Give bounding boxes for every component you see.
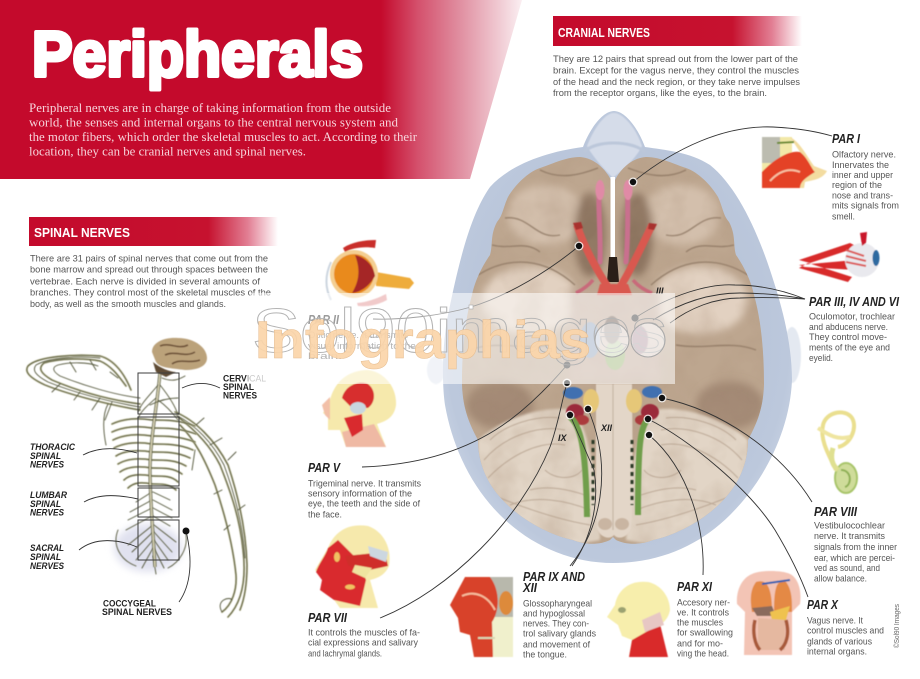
text block: PAR XI: ve. It controls xyxy=(677,608,729,618)
inner ear picture: PAR VIII xyxy=(818,412,857,493)
intro paragraph: location, they can be cranial nerves and spinal nerves. xyxy=(29,144,306,158)
label: sacral: SACRAL xyxy=(30,543,64,553)
label: cervical xyxy=(182,374,266,400)
leader: PAR I xyxy=(628,127,832,186)
label: thoracic: SPINAL xyxy=(30,451,61,461)
throat picture: PAR IX and XII xyxy=(450,577,513,657)
text block: PAR II xyxy=(308,313,416,362)
pelvic haze xyxy=(114,524,182,572)
intro paragraph: the motor fibers, which order the skeletal muscles to act. According to their xyxy=(29,130,418,144)
eye muscles picture: PAR III, IV, VI xyxy=(799,232,880,282)
text block: PAR VII xyxy=(308,611,420,660)
roman numeral labels xyxy=(558,286,664,443)
label: sacral: NERVES xyxy=(30,561,64,571)
leader: PAR VII xyxy=(380,378,572,618)
text block: PAR I: region of the xyxy=(832,180,882,191)
text block: PAR V: the face. xyxy=(308,510,342,520)
central slit xyxy=(607,177,619,282)
text block: PAR I: Innervates the xyxy=(832,160,889,171)
text block: PAR XI: Accesory ner- xyxy=(677,598,730,608)
text block: PAR I: PAR I xyxy=(832,132,860,146)
text block: PAR VII: It controls the muscles of fa- xyxy=(308,628,420,638)
text block: PAR XI: ving the head. xyxy=(677,648,729,660)
text block: PAR II: visual information to the xyxy=(308,341,416,352)
spinal cord xyxy=(138,372,185,567)
skeleton of nervous system figure xyxy=(27,338,247,617)
leader: PAR VIII xyxy=(658,394,812,502)
skull shell xyxy=(427,111,801,563)
translucent band xyxy=(250,293,675,384)
text block: PAR III, IV and VI: eyelid. xyxy=(809,353,833,364)
text block: PAR II: Optic nerve. It transmits xyxy=(308,330,408,341)
text block: PAR V xyxy=(308,461,421,520)
text block: PAR X: Vagus nerve. It xyxy=(807,616,863,626)
brain base xyxy=(462,157,764,544)
spinal nerves description xyxy=(30,254,271,310)
text block: PAR XI: and for mo- xyxy=(677,638,723,650)
text block: PAR VII: PAR VII xyxy=(308,611,347,625)
heading: cranial nerves xyxy=(553,16,802,46)
spinal segment labels xyxy=(30,374,266,617)
text block: PAR III, IV and VI: and abducens nerve. xyxy=(809,322,888,333)
label: lumbar: LUMBAR xyxy=(30,490,67,500)
text block: PAR VIII: ear, which are percei- xyxy=(814,553,895,564)
text block: PAR VIII: Vestibulocochlear xyxy=(814,520,885,532)
label: lumbar xyxy=(30,490,138,518)
text block: PAR I: Olfactory nerve. xyxy=(832,150,896,160)
intro paragraph: Peripheral nerves are in charge of taking information from the outside xyxy=(29,101,391,115)
label: sacral: SPINAL xyxy=(30,552,61,562)
text block: PAR IX and XII xyxy=(522,570,596,660)
text block: PAR VIII xyxy=(814,505,897,584)
text block: PAR V: PAR V xyxy=(308,461,341,475)
leader: PAR V xyxy=(362,362,570,467)
eye picture: PAR II xyxy=(326,240,414,306)
brain stem xyxy=(596,384,633,538)
text block: PAR I: smell. xyxy=(832,212,855,222)
text block: PAR IX and XII: XII xyxy=(522,581,537,595)
mini brain xyxy=(152,338,207,377)
text block: PAR V: eye, the teeth and the side of xyxy=(308,498,420,510)
head picture: PAR V xyxy=(322,370,396,447)
label: thoracic xyxy=(30,442,137,470)
panel: spinal nerves heading and text xyxy=(29,217,279,310)
text block: PAR I xyxy=(832,132,899,222)
torso picture: PAR X xyxy=(737,571,801,655)
leader: PAR II xyxy=(373,242,584,319)
text block: PAR I: mits signals from xyxy=(832,200,899,212)
leader: PAR IX and XII xyxy=(566,404,602,566)
text block: PAR V: sensory information of the xyxy=(308,488,412,500)
label: cervical: SPINAL xyxy=(223,382,254,392)
cerebellum xyxy=(478,409,748,545)
title: Peripherals xyxy=(32,18,363,90)
spinal nerves description: bone marrow and spread out through spaces between the xyxy=(30,264,268,276)
cranial nerves description: from the receptor organs, like the eyes, to the brain. xyxy=(553,88,767,99)
text block: PAR VIII: allow balance. xyxy=(814,574,867,584)
cranial nerves description: They are 12 pairs that spread out from the lower part of the xyxy=(553,54,798,65)
label: thoracic: NERVES xyxy=(30,460,64,470)
red header banner xyxy=(0,0,522,179)
panel: cranial nerves heading and text xyxy=(553,16,802,99)
label: lumbar: SPINAL xyxy=(30,499,61,509)
text block: PAR IX and XII: the tongue. xyxy=(523,650,567,660)
text block: PAR III, IV and VI xyxy=(809,295,899,364)
text block: PAR X: glands of various xyxy=(807,636,872,648)
heading: cranial nerves: CRANIAL NERVES xyxy=(558,25,650,40)
leader: PAR XI xyxy=(644,430,703,575)
text block: PAR III, IV and VI: They control move- xyxy=(809,332,887,343)
text block: PAR IX and XII: and movement of xyxy=(523,640,590,650)
text block: PAR X: control muscles and xyxy=(807,626,884,636)
central brain illustration xyxy=(427,111,801,563)
label: thoracic: THORACIC xyxy=(30,442,75,452)
credit: ©Sol90 Images xyxy=(893,604,901,648)
leader: PAR X xyxy=(644,414,808,597)
text block: PAR VIII: PAR VIII xyxy=(814,505,857,519)
olfactory nerves xyxy=(596,180,632,262)
text block: PAR X: internal organs. xyxy=(807,646,867,658)
text block: PAR IX and XII: nerves. They con- xyxy=(523,618,589,630)
heading: spinal nerves: SPINAL NERVES xyxy=(34,225,130,240)
text block: PAR IX and XII: trol salivary glands xyxy=(523,628,596,640)
colored nerve nuclei xyxy=(563,316,662,517)
text block: PAR XI xyxy=(677,580,733,660)
outlined watermark: Sol90images xyxy=(252,297,667,366)
text block: PAR XI: for swallowing xyxy=(677,628,733,638)
text block: PAR I: inner and upper xyxy=(832,170,893,181)
text block: PAR IX and XII: Glossopharyngeal xyxy=(523,598,592,610)
text block: PAR III, IV and VI: Oculomotor, trochlear xyxy=(809,312,895,322)
heading: spinal nerves xyxy=(29,217,279,246)
spinal nerves description: branches. They control most of the skeletal muscles of the xyxy=(30,288,271,298)
segment boxes xyxy=(138,373,179,560)
spinal nerves description: body, as well as the smooth muscles and glands. xyxy=(30,299,226,310)
right hanging arm nerves xyxy=(175,412,247,617)
cranial nerves description xyxy=(553,54,800,99)
skull picture: PAR XI xyxy=(607,582,670,657)
text block: PAR V: Trigeminal nerve. It transmits xyxy=(308,478,421,490)
spinal nerves description: There are 31 pairs of spinal nerves that come out from the xyxy=(30,254,268,264)
lobe folds xyxy=(470,168,756,350)
leader lines and dots xyxy=(362,127,832,618)
text block: PAR XI: the muscles xyxy=(677,618,723,628)
intro paragraph: world, the senses and internal organs to the central nervous system and xyxy=(29,116,399,130)
optic arteries xyxy=(573,222,657,295)
text block: PAR III, IV and VI: ments of the eye and xyxy=(809,342,890,354)
head picture: PAR VII xyxy=(315,525,390,608)
text block: PAR VII: cial expressions and salivary xyxy=(308,638,418,648)
label: coccygeal: COCCYGEAL xyxy=(103,598,156,608)
text block: PAR III, IV and VI: PAR III, IV AND VI xyxy=(809,295,899,309)
text block: PAR IX and XII: and hypoglossal xyxy=(523,608,585,620)
leader: PAR III, IV, VI xyxy=(631,285,805,323)
text block: PAR VIII: signals from the inner xyxy=(814,542,897,553)
text block: PAR XI: PAR XI xyxy=(677,580,712,594)
raised left arm nerves xyxy=(27,355,140,445)
frontal lobes xyxy=(466,185,764,429)
text block: PAR II: PAR II xyxy=(308,313,339,327)
olfactory picture: PAR I xyxy=(762,137,827,188)
label: lumbar: NERVES xyxy=(30,508,64,518)
roman numeral labels: IX xyxy=(558,433,568,443)
roman numeral labels: III xyxy=(656,286,664,296)
text block: PAR VIII: nerve. It transmits xyxy=(814,531,885,542)
brain texture xyxy=(481,198,748,543)
label: sacral xyxy=(30,541,137,571)
orange watermark: Infographias xyxy=(255,311,591,370)
label: cervical: NERVES xyxy=(223,390,257,400)
text block: PAR I: nose and trans- xyxy=(832,190,893,202)
cranial nerves description: brain. Except for the vagus nerve, they control the muscles xyxy=(553,66,799,76)
label: coccygeal: SPINAL NERVES xyxy=(102,607,172,617)
text block: PAR VII: and lachrymal glands. xyxy=(308,648,382,660)
white ring glyphs xyxy=(595,323,665,357)
text block: PAR IX and XII: PAR IX AND xyxy=(523,570,585,584)
spinal nerves description: vertebrae. Each nerve is divided in several amounts of xyxy=(30,276,260,288)
label: coccygeal xyxy=(102,528,190,617)
roman numeral labels: XII xyxy=(600,423,613,433)
rib nerves xyxy=(112,419,196,574)
text block: PAR X: PAR X xyxy=(807,598,839,612)
text block: PAR VIII: ved as sound, and xyxy=(814,563,880,574)
text block: PAR X xyxy=(807,598,884,658)
cranial nerves description: of the head and the neck region, or they take nerve impulses xyxy=(553,77,800,88)
text block: PAR II: brain. xyxy=(308,351,342,362)
watermark overlay xyxy=(250,293,675,384)
label: cervical: CERVICAL xyxy=(223,374,266,384)
intro paragraph xyxy=(29,101,418,158)
